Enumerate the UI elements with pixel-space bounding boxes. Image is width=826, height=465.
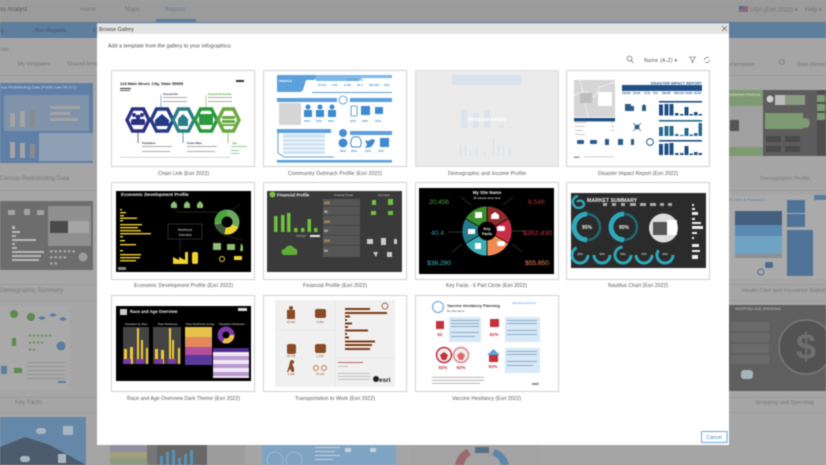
green bar chart <box>274 213 318 232</box>
clock icon <box>382 303 388 309</box>
card caption: Financial Profile (Esri 2022) <box>303 283 367 289</box>
fact values: $38,290 <box>427 260 451 267</box>
background card: Shopping and Spending <box>729 305 826 413</box>
dialog panel <box>97 23 729 445</box>
table toggle <box>296 235 306 237</box>
thumbnail heading: 123 Main Street, City, State 55555 <box>120 81 184 86</box>
card caption: Vaccine Hesitancy (Esri 2022) <box>452 396 521 402</box>
key fact numbers: 20.5% <box>318 83 326 87</box>
values: 20,456 <box>287 320 296 324</box>
dialog title bar <box>97 23 729 34</box>
footer logo: esri <box>574 155 580 159</box>
header banner: PROFILE <box>279 79 292 83</box>
blue toolbar: ly... <box>0 28 9 34</box>
transport icons <box>287 306 326 372</box>
social icons <box>339 137 389 148</box>
cancel button: Cancel <box>706 435 722 441</box>
key fact numbers: 2,540 <box>344 83 351 87</box>
metric rows: 104 <box>324 239 330 243</box>
background card: Key Facts: ★★★★★★ <box>28 333 53 338</box>
donut chart <box>218 213 236 231</box>
values: 79,135 <box>316 372 325 376</box>
divider lines <box>275 300 395 387</box>
background card: Key Facts: Key Facts <box>15 400 42 406</box>
map <box>279 103 301 125</box>
stat row: 79,600 <box>685 92 693 95</box>
stat row: 41,34 <box>644 92 651 95</box>
card: Vaccine Hesitancy: My Site Name <box>447 309 465 313</box>
card: Key Facts - 6 Part Circle: 35 minute drive time <box>473 196 501 200</box>
small gauges <box>572 247 673 263</box>
card: Nautilus Chart: 40% <box>599 252 605 256</box>
card: Nautilus Chart: 25% <box>577 252 583 256</box>
percentages: 33% <box>316 119 322 123</box>
top navigation bar: Reports <box>165 7 186 13</box>
bar charts <box>659 101 702 155</box>
stat row: $265,500 <box>674 92 685 95</box>
background card: Health Care and Insurance Statistics <box>729 195 826 301</box>
fact values: 8,546 <box>528 199 545 206</box>
header banner: KEY FACTS <box>347 78 363 82</box>
percentages: 33% <box>375 119 381 123</box>
top navigation bar: USA (Esri 2022) ▾ <box>750 8 798 14</box>
hexagon chain <box>127 109 239 131</box>
card: Nautilus Chart: 95% <box>582 225 593 231</box>
percentages: 28% <box>304 119 310 123</box>
top navigation bar: Maps <box>125 7 140 13</box>
metric rows: 54 <box>324 249 328 253</box>
background card: Shopping and Spending: SHOPPING AND SPENDING <box>735 307 781 311</box>
card: Vaccine Hesitancy <box>416 296 558 402</box>
percentages: 33% <box>378 149 384 153</box>
note text <box>338 362 370 380</box>
background card: Health Care and Insurance Statistics: th Care & Insurance <box>729 197 765 202</box>
card caption: Chain Link (Esri 2022) <box>158 171 209 177</box>
values: 28,708 <box>287 354 296 358</box>
panel headings: Race Distribution by Age <box>186 322 215 326</box>
key fact numbers: $55,050 <box>369 83 380 87</box>
center circle: Key <box>484 227 491 231</box>
esri logo: esri <box>379 377 391 384</box>
percentages: 28% <box>362 119 368 123</box>
top navigation bar: ss Analyst <box>0 7 27 13</box>
thumbnail title <box>270 192 276 198</box>
footnote lines <box>432 377 484 384</box>
horizontal bars <box>692 204 703 259</box>
faded thumbnail <box>452 75 521 156</box>
values <box>287 320 325 376</box>
stat row: 43.8 <box>653 92 658 95</box>
horizontal bars <box>345 308 387 350</box>
template tabs <box>0 47 826 76</box>
card caption: Community Outreach Profile (Esri 2022) <box>288 171 382 177</box>
data table <box>213 348 249 378</box>
metric rows: 54 <box>324 229 328 233</box>
thumbnail title: Economic Development Profile <box>121 192 189 197</box>
background card: Key Facts: ★★★★ <box>28 340 45 345</box>
chain labels: Household Income <box>208 92 232 96</box>
card: Vaccine Hesitancy: View More ArcGIS Info <box>512 302 537 305</box>
background card: Demographic Profile: GRAPHIC PROFILE <box>729 93 762 97</box>
card: Community Outreach Profile <box>264 70 406 177</box>
card: Nautilus Chart: 95% <box>620 252 626 256</box>
yellow bar chart <box>120 209 151 261</box>
panel headings <box>125 322 246 326</box>
card: Nautilus Chart: 90% <box>619 225 630 231</box>
background card: Key Facts <box>0 306 97 413</box>
metric rows: 133 <box>324 201 330 205</box>
cloud icon <box>281 246 297 255</box>
panel headings: Population Distribution <box>219 322 246 326</box>
cancel button <box>702 432 727 442</box>
background card: landscape map <box>0 417 86 465</box>
card caption: Economic Development Profile (Esri 2022) <box>134 283 233 289</box>
donut chart <box>220 329 232 341</box>
workforce overview box: Workforce <box>178 228 192 232</box>
map <box>574 80 615 121</box>
section bars <box>277 98 392 163</box>
percentages: 62% <box>489 364 497 369</box>
info callouts <box>449 317 540 373</box>
card: Economic Development Profile <box>112 182 254 289</box>
percentages: 95% <box>351 149 357 153</box>
stacked area panels <box>123 327 212 365</box>
workforce overview box: Overview <box>178 233 192 237</box>
card: Vaccine Hesitancy: Vaccine Hesitancy Planning <box>447 303 500 308</box>
percentages <box>304 119 384 153</box>
background card: Demographic Profile <box>729 90 826 191</box>
chain labels: Households <box>163 92 178 96</box>
panel headings: Race Distribution <box>158 322 178 326</box>
fact values <box>427 199 552 267</box>
center circle: Facts <box>482 232 492 236</box>
background card: Shopping and Spending: Shopping and Spending <box>755 400 814 406</box>
top navigation bar: Help ▾ <box>805 8 822 14</box>
chain labels <box>120 80 247 158</box>
percentages: 62% <box>457 365 465 370</box>
percentages <box>438 332 498 370</box>
dialog: Browse Gallery <box>97 23 729 445</box>
chain labels: Population <box>142 141 156 145</box>
card: Nautilus Chart <box>566 182 710 289</box>
card: Chain Link <box>112 70 254 177</box>
percentages: 62 <box>438 332 443 337</box>
template tabs: d template <box>729 62 755 68</box>
title: My Site Name <box>473 190 502 195</box>
fact values: $352,430 <box>523 230 552 237</box>
background card: Shopping and Spending: $ <box>796 326 816 367</box>
card: Financial Profile: Key Facts <box>378 193 390 197</box>
card: Transportation to Work <box>264 296 406 402</box>
center circle <box>478 222 496 240</box>
key fact numbers: 25% <box>384 83 390 87</box>
red icons <box>436 319 499 362</box>
stat row <box>622 92 702 95</box>
background card: Demographic Summary: ★★ <box>49 261 58 267</box>
card caption: Race and Age Overview Dark Theme (Esri 2022) <box>127 396 240 402</box>
background card: Demographic Summary: Demographic Summary <box>0 288 63 294</box>
report title: DISASTER IMPACT REPORT <box>651 82 703 86</box>
footer <box>118 267 126 270</box>
card: Key Facts - 6 Part Circle <box>416 182 558 289</box>
fact values: 40.4 <box>431 230 444 237</box>
key fact numbers <box>318 83 390 87</box>
esri logo: esri <box>532 382 539 386</box>
card: Nautilus Chart: 50% <box>662 252 668 256</box>
card caption: Nautilus Chart (Esri 2022) <box>608 283 668 289</box>
header banner <box>277 75 392 93</box>
background card: Demographic Summary: ★★★★★★ <box>49 249 76 255</box>
side list <box>575 122 614 135</box>
percentages: 33% <box>365 149 371 153</box>
title: Race and Age Overview <box>130 309 178 314</box>
key fact numbers: 48.4 <box>357 83 363 87</box>
template tabs: My templates <box>18 62 51 68</box>
top navigation bar: Home <box>80 7 97 13</box>
column headings: Financial Trends <box>334 193 354 197</box>
fact values: $55,650 <box>525 260 549 267</box>
map circle <box>649 214 678 242</box>
card: Nautilus Chart: 40% <box>641 252 647 256</box>
background card: Demographic Summary <box>0 201 97 301</box>
metric rows: 90 <box>324 210 328 214</box>
percentages: 62% <box>490 332 498 337</box>
card caption: Demographic and Income Profile <box>448 171 526 177</box>
title <box>432 302 444 312</box>
leader lines <box>448 197 524 252</box>
wedge icons <box>468 212 505 249</box>
card: Financial Profile: Financial Profile <box>277 192 310 198</box>
people icons <box>304 104 383 117</box>
gallery toolbar: Name (A-Z) ▾ <box>644 58 677 64</box>
card caption: Key Facts - 6 Part Circle (Esri 2022) <box>446 283 527 289</box>
chain labels: Home Value <box>187 141 202 145</box>
stat row: 82,540 <box>633 92 641 95</box>
card caption: Transportation to Work (Esri 2022) <box>295 396 375 402</box>
background card: Census Redistricting Data: sus Redistricting Data (Public Law 94-171) <box>1 84 77 90</box>
background card: Census Redistricting Data: Census Redistricting Data <box>0 176 70 182</box>
background card: Demographic Summary: ★★★★ <box>49 255 67 261</box>
large gauges <box>574 214 637 240</box>
background cards below the dialog <box>110 445 540 465</box>
stat row: 736,664 <box>622 92 631 95</box>
blue toolbar: Cr <box>93 28 99 34</box>
connector lines <box>138 95 228 143</box>
center icons <box>577 104 653 145</box>
right green icons <box>371 199 393 215</box>
panel headings: Population by Race <box>125 322 148 326</box>
template added notice: Template added <box>468 117 506 123</box>
employment icons <box>171 201 203 208</box>
card: Demographic and Income Profile <box>416 70 558 177</box>
key fact numbers: 3.50 <box>332 83 338 87</box>
blue toolbar: Run Reports <box>35 28 66 34</box>
template tabs: Shared temp <box>67 62 98 68</box>
pie wedges <box>462 206 512 256</box>
background card: Key Facts: ★★ <box>28 347 37 352</box>
background card: Census Redistricting Data <box>0 83 97 191</box>
stat row: $39,660 <box>662 92 671 95</box>
percentages: 62% <box>439 365 447 370</box>
percentages: 66% <box>340 149 346 153</box>
background card: Demographic Profile: Demographic Profile <box>760 176 810 182</box>
top navigation bar <box>0 0 826 22</box>
instruction text: Add a template from the gallery to your infographics. <box>108 44 232 50</box>
transport icons <box>173 243 243 264</box>
callout text lines <box>451 320 537 366</box>
metric rows: 104 <box>324 220 330 224</box>
card: Financial Profile <box>264 182 406 289</box>
metric rows <box>323 199 360 257</box>
card caption: Disaster Impact Report (Esri 2022) <box>598 171 678 177</box>
values: 5,006 <box>316 320 324 324</box>
language table <box>278 133 334 157</box>
workforce overview box <box>168 204 242 252</box>
title: MARKET SUMMARY <box>587 198 638 204</box>
card: Race and Age Overview Dark Theme <box>112 296 254 402</box>
dialog title bar: Browse Gallery <box>99 27 134 33</box>
percentages: 33% <box>350 119 356 123</box>
values: 1,130 <box>316 354 324 358</box>
blue toolbar <box>0 22 826 38</box>
percentages: 95% <box>328 119 334 123</box>
house roof <box>487 349 500 355</box>
stat row <box>603 203 672 206</box>
fact values: 20,456 <box>429 199 449 206</box>
gallery toolbar <box>627 56 710 64</box>
template tabs: late. <box>0 47 11 53</box>
values: 3,206 <box>288 372 295 376</box>
chain labels: Age <box>232 141 237 145</box>
stat row: 36,542 <box>694 92 702 95</box>
card: Disaster Impact Report <box>566 70 710 177</box>
